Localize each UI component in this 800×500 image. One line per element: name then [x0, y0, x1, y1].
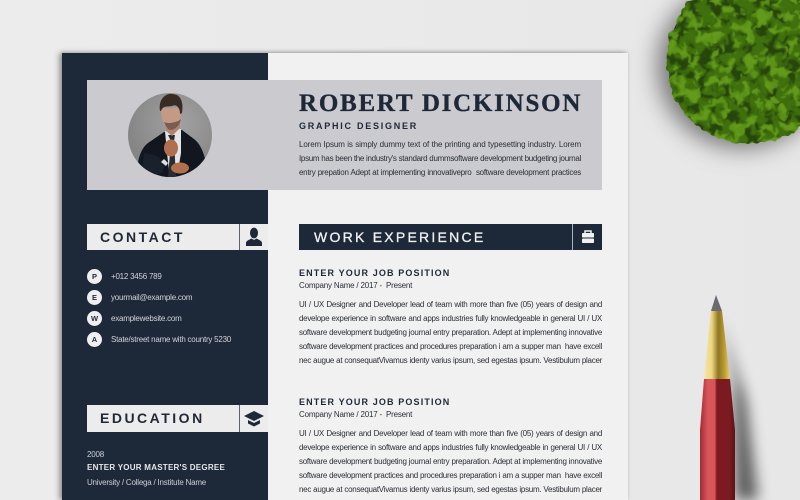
- contact list: examplewebsite.com: [111, 314, 182, 323]
- profile summary: [299, 140, 581, 177]
- potted plant: [666, 0, 800, 144]
- job entry two: software development practices and procedures preparation i am a supper man have excell: [299, 471, 602, 480]
- job entry one: software development practices and procedures preparation i am a supper man have excell: [299, 342, 602, 351]
- job entry one: Company Name / 2017 - Present: [299, 281, 412, 290]
- profile summary: entry prepation Adept at implementing innovativepro software development practices: [299, 168, 581, 177]
- job entry one: UI / UX Designer and Developer lead of team with more than five (05) years of design and: [299, 300, 602, 309]
- resume page: [62, 53, 628, 500]
- contact list: yourmail@example.com: [111, 293, 192, 302]
- job entry two: software development budgeting journal entry preparation. Adept at implementing innovative: [299, 457, 602, 466]
- contact heading bar: [87, 224, 268, 250]
- portrait photo: [128, 93, 212, 177]
- education heading bar: EDUCATION: [100, 410, 205, 426]
- contact list: E: [92, 293, 97, 302]
- work experience heading bar: WORK EXPERIENCE: [314, 229, 485, 245]
- icon: person: [246, 228, 262, 246]
- education heading bar: [87, 405, 268, 432]
- job entry one: software development budgeting journal entry preparation. Adept at implementing innovative: [299, 328, 602, 337]
- contact list: P: [92, 272, 97, 281]
- work experience heading bar: [299, 224, 602, 250]
- job entry two: UI / UX Designer and Developer lead of team with more than five (05) years of design and: [299, 429, 602, 438]
- job entry two: nec augue at consequatVivamus identy varius ipsum, sed egestas ipsum. Vestibulum placer: [299, 485, 602, 494]
- job entry one: [299, 268, 602, 365]
- education entry: 2008: [87, 450, 104, 459]
- contact list: W: [91, 314, 98, 323]
- icon: graduation cap: [244, 411, 264, 426]
- job entry one: nec augue at consequatVivamus identy varius ipsum, sed egestas ipsum. Vestibulum placer: [299, 356, 602, 365]
- job entry two: [299, 397, 602, 494]
- contact list: State/street name with country 5230: [111, 335, 231, 344]
- profile summary: Lorem Ipsum is simply dummy text of the printing and typesetting industry. Lorem: [299, 140, 581, 149]
- education entry: ENTER YOUR MASTER'S DEGREE: [87, 463, 225, 472]
- job entry one: ENTER YOUR JOB POSITION: [299, 268, 450, 278]
- contact list: A: [92, 335, 97, 344]
- job entry one: develope experience in software and apps industries fully knowledgeable in general UI / UX: [299, 314, 602, 323]
- sidebar panel: [62, 53, 268, 500]
- education entry: [87, 450, 225, 487]
- icon: briefcase: [582, 230, 594, 243]
- plant shadow: [672, 0, 800, 136]
- job title: GRAPHIC DESIGNER: [299, 121, 418, 131]
- pen: [700, 295, 767, 500]
- job entry two: ENTER YOUR JOB POSITION: [299, 397, 450, 407]
- job entry two: Company Name / 2017 - Present: [299, 410, 412, 419]
- name heading: ROBERT DICKINSON: [299, 90, 582, 117]
- header band: [87, 80, 602, 190]
- job entry two: develope experience in software and apps industries fully knowledgeable in general UI / UX: [299, 443, 602, 452]
- contact list: +012 3456 789: [111, 272, 162, 281]
- contact heading bar: CONTACT: [100, 229, 185, 245]
- profile summary: Ipsum has been the industry's standard dummsoftware development budgeting journal: [299, 154, 581, 163]
- contact list: [87, 269, 231, 347]
- education entry: University / Collega / Institute Name: [87, 478, 206, 487]
